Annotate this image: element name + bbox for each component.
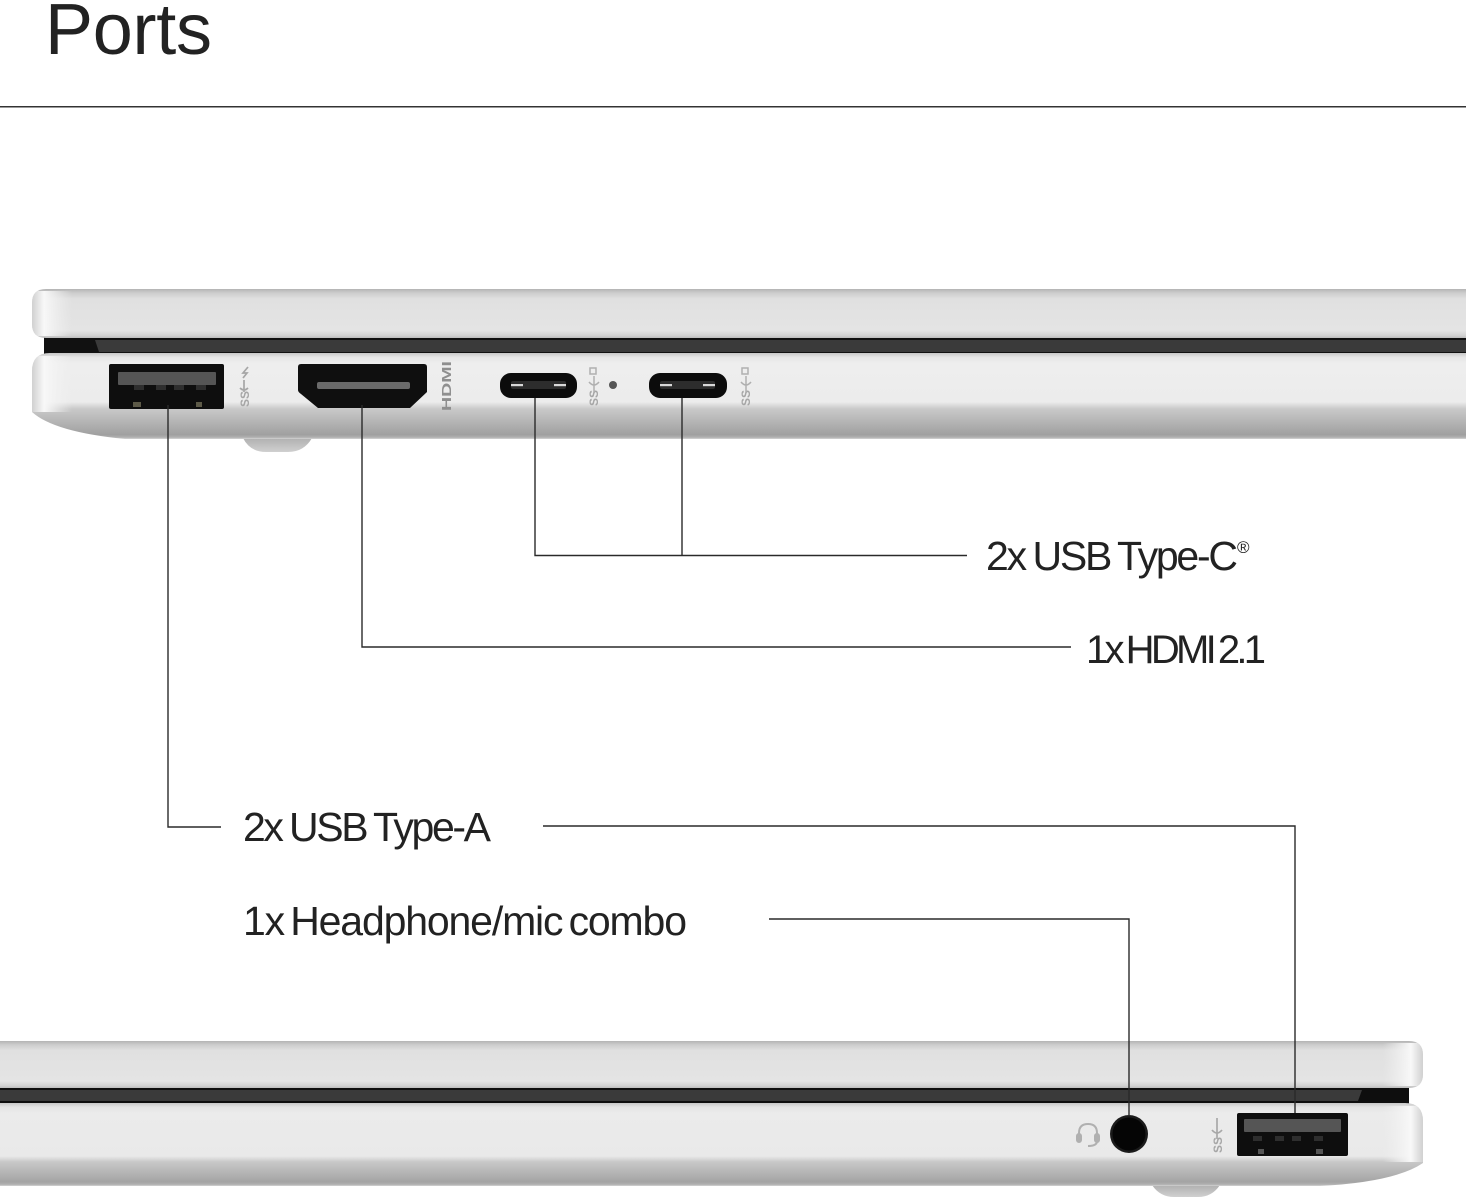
indicator LED	[609, 381, 617, 389]
icon: SS USB display 2	[739, 368, 753, 406]
leader: USB Type-A right	[543, 826, 1295, 1113]
lid	[0, 1041, 1423, 1088]
lid	[32, 289, 1466, 338]
rubber foot	[243, 438, 312, 452]
leader: HDMI	[362, 405, 1071, 647]
rubber foot	[1152, 1185, 1220, 1197]
hinge gap	[0, 1086, 1409, 1105]
hinge gap	[44, 336, 1466, 355]
label: USB Type-C: 2x USB Type-C	[986, 533, 1238, 579]
label: HDMI: 1x HDMI 2.1	[1086, 628, 1266, 672]
laptop: left side view	[32, 289, 1466, 452]
leader: headphone jack	[769, 919, 1129, 1116]
icon: SS USB with charge bolt	[238, 367, 252, 407]
leader: USB Type-A left	[168, 405, 221, 827]
port: USB Type-A right	[1237, 1113, 1348, 1156]
icon: SS USB: SS	[1211, 1137, 1225, 1153]
laptop: right side view	[0, 1041, 1423, 1197]
icon: SS USB with charge bolt: SS	[238, 391, 252, 407]
icon: SS USB	[1211, 1118, 1225, 1153]
icon: headset	[1077, 1124, 1099, 1146]
port: USB Type-A left	[109, 364, 224, 409]
base	[0, 1103, 1423, 1186]
leader: USB Type-C	[535, 398, 967, 556]
icon: SS USB display	[587, 368, 601, 406]
label: headphone/mic combo: 1x Headphone/mic combo	[243, 898, 687, 944]
callout lines	[168, 398, 1295, 1116]
port: USB Type-C 1	[500, 373, 577, 398]
header divider	[0, 106, 1466, 108]
base	[32, 353, 1466, 439]
label: USB Type-C: ®	[1237, 538, 1250, 557]
icon: HDMI logo: HDMI	[439, 361, 454, 411]
label: USB Type-A: 2x USB Type-A	[243, 804, 492, 850]
port: USB Type-C 2	[649, 373, 727, 398]
port: HDMI	[298, 364, 427, 408]
icon: SS USB display: SS	[587, 390, 601, 406]
icon: SS USB display 2: SS	[739, 390, 753, 406]
port: headphone jack	[1110, 1115, 1148, 1153]
